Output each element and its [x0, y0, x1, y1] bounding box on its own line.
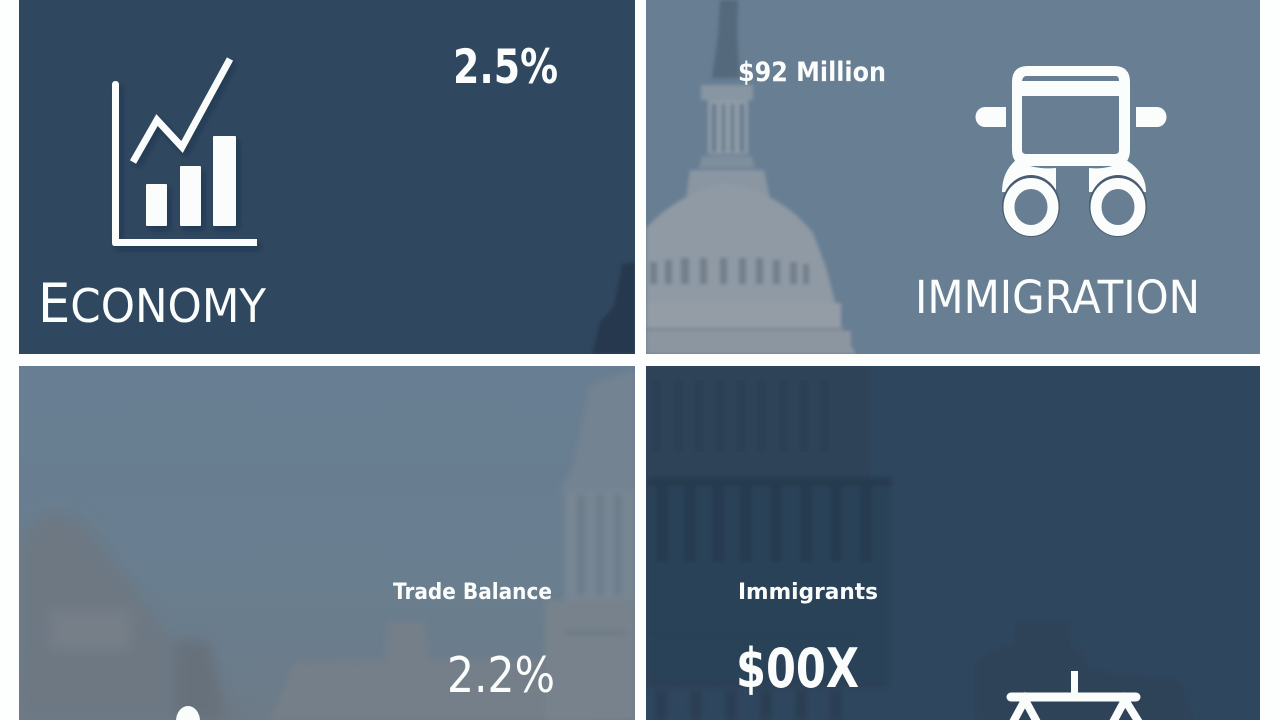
stat: 2.2%: 2.2% — [447, 647, 555, 704]
capitol fragment: economy panel corner — [592, 262, 635, 354]
stat: 992 million: $92 Million — [738, 57, 886, 88]
capitol scene: cost panel — [646, 476, 892, 718]
vehicle fenders — [1002, 160, 1146, 192]
icon: growth chart — [112, 59, 257, 246]
vehicle side handles — [976, 107, 1166, 127]
stat: 2.5%: 2.5% — [453, 40, 558, 95]
label: immigrants: Immigrants — [738, 580, 878, 605]
panel: economy — [19, 0, 635, 354]
vehicle body — [1012, 66, 1130, 166]
stat: $00X: $00X — [736, 637, 859, 700]
heading: immigration: IMMIGRATION — [915, 271, 1200, 324]
vehicle wheel outlines — [1002, 175, 1147, 237]
capitol scene: trade panel — [19, 370, 635, 720]
heading: economy: ECONOMY — [38, 272, 267, 335]
icon: immigration vehicle — [976, 66, 1166, 237]
vehicle wheels — [1009, 184, 1140, 230]
panel: immigration — [646, 0, 1260, 354]
icon: partial circle — [176, 706, 200, 720]
panel: trade balance — [19, 366, 635, 720]
icon: balance scale — [1011, 671, 1140, 720]
capitol dome: immigration panel — [646, 0, 856, 354]
panel: immigrants cost — [646, 366, 1260, 720]
label: trade balance: Trade Balance — [393, 580, 552, 605]
